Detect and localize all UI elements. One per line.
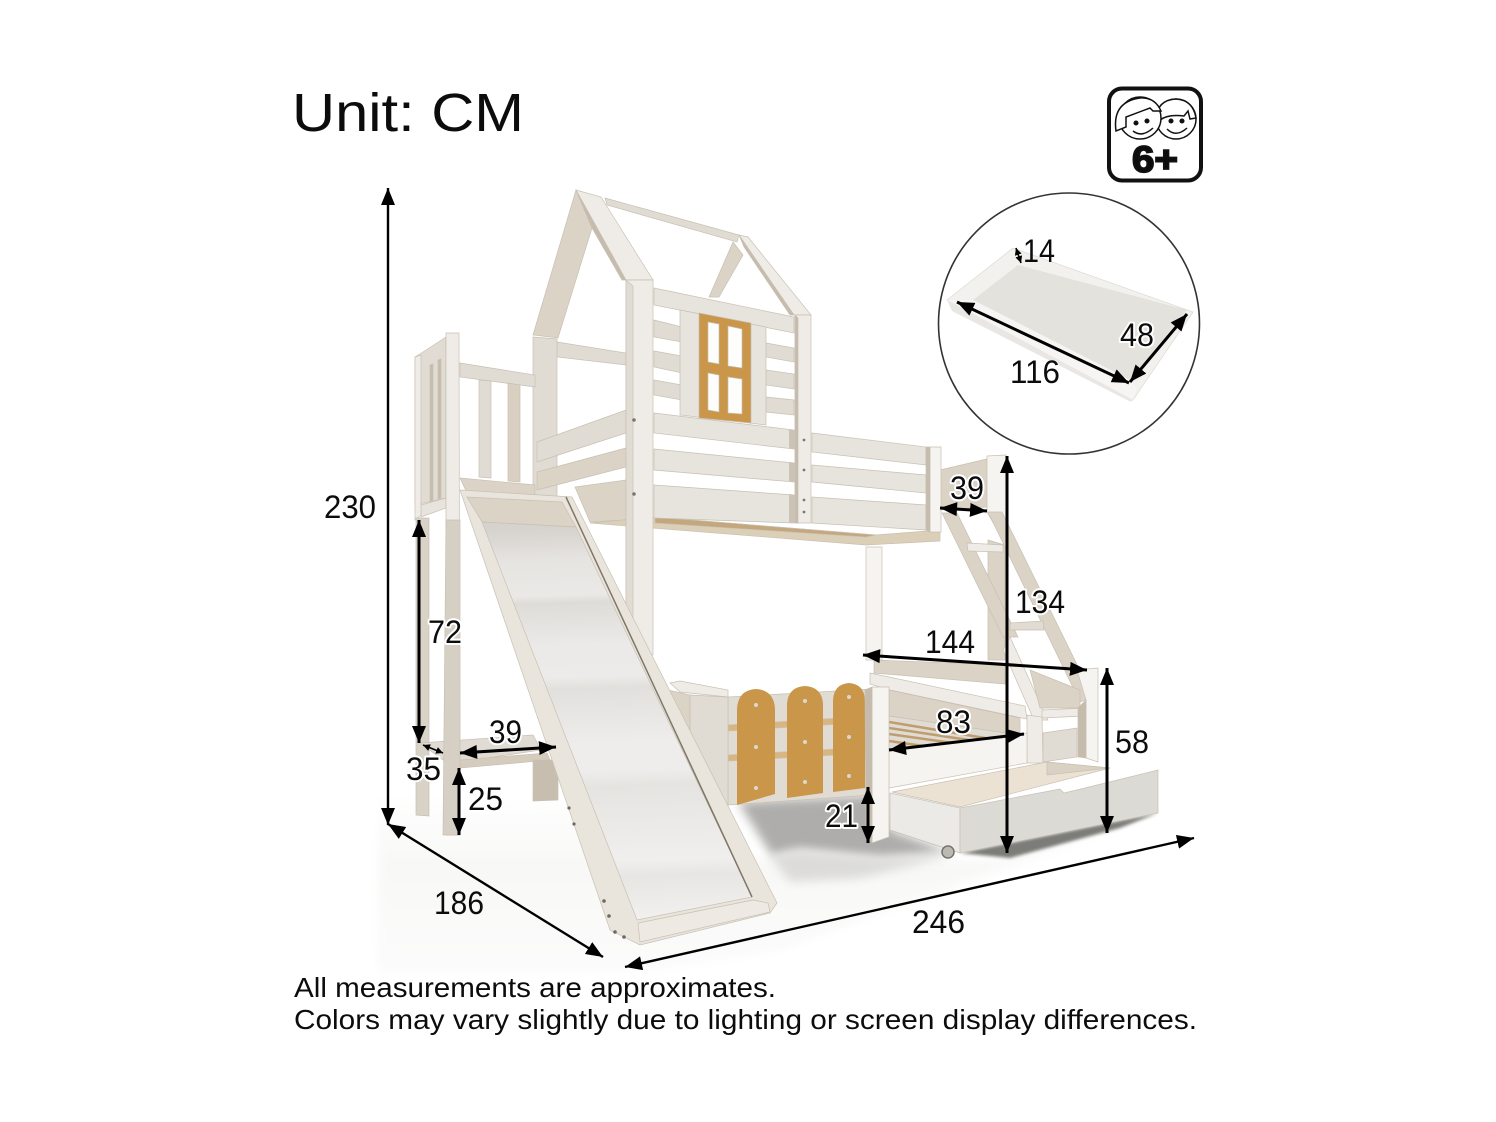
footnote [294,972,1197,1035]
lower bed front rail [889,733,1027,788]
left tower panel [415,337,446,520]
dimension arrows [388,188,1194,967]
label 246: 246 [912,904,965,940]
arrow: 134 [1006,456,1008,853]
label 48: 48 [1120,317,1154,353]
label 116: 116 [1010,354,1060,390]
title: Unit: CM [292,83,524,143]
arrow: 144 [863,655,1087,670]
house left gable [533,190,653,338]
house right gable [709,235,811,315]
label 25: 25 [468,781,503,817]
rear cross beam [557,342,626,365]
slide right rail line [566,497,752,897]
tower rear leg [416,518,429,816]
label lower 39: 39 [489,714,522,750]
badge text 6+: 6+ [1132,139,1178,180]
lower bed back post [866,547,882,660]
arrow: upper 39 [940,508,987,511]
right guard post [926,447,941,532]
slide frame [460,490,777,945]
ladder [940,455,1093,720]
right guard rails [812,433,926,530]
arrow: 35 [423,745,443,753]
upper bed slat base [590,517,940,545]
arrow: 14 [1016,248,1021,263]
label upper 39: 39 [950,470,984,506]
house ridge beam [605,198,739,242]
rear left post [533,337,557,500]
house front top beam [654,288,794,333]
lower bed slats [889,722,985,747]
slide top board [467,497,576,527]
window wall slats [654,320,794,415]
lower bed fence back panel [728,689,872,805]
label 144: 144 [925,624,975,660]
arrow: 58 [1106,668,1108,833]
left guard rails [537,410,626,522]
label 134: 134 [1015,584,1065,620]
bunk bed [415,190,1158,945]
label 186: 186 [434,885,484,921]
drawer wheel [942,846,954,858]
label 58: 58 [1115,724,1149,760]
arrow: length 246 [625,838,1194,967]
badge frame [1109,88,1201,180]
arrow: 25 [458,768,460,835]
tray [947,248,1193,402]
arrow: 116 [957,302,1129,383]
window panel [680,310,766,425]
step platform [420,735,558,801]
wooden fence pickets [737,683,865,805]
arrow: 72 [418,520,420,743]
slide bolts [567,806,626,939]
left tower balcony rail [460,363,535,497]
label 230: 230 [324,489,376,525]
arrow: lower 39 [460,747,556,753]
inset circle [938,193,1200,454]
footnote line 2: Colors may vary slightly due to lighting or screen display differences. [294,1004,1197,1035]
arrow: 83 [889,734,1024,750]
front guard rails [654,413,794,523]
age badge [1109,88,1201,180]
front house post [626,280,653,655]
slide bottom bar [638,900,770,942]
arrow: height 230 [387,188,389,825]
right house post [795,315,811,523]
label 83: 83 [936,704,971,740]
lower bed end panel [1027,668,1098,763]
arrow: depth 186 [388,824,603,957]
label 72: 72 [428,614,462,650]
lower bed head rails [870,660,1027,750]
tower front leg [443,333,460,835]
lower bed left post [668,681,728,810]
arrow: 21 [866,787,870,843]
slide surface [482,522,752,920]
floor shadow [378,790,1158,972]
label 14: 14 [1023,233,1055,269]
icon: two children faces [1116,97,1196,139]
lower bed right post [865,687,889,843]
arrow: 48 [1130,314,1187,382]
footnote line 1: All measurements are approximates. [294,972,776,1003]
wooden window [699,313,751,423]
dimension labels [324,470,1149,940]
inset: trundle tray [938,193,1200,454]
drawer [890,762,1158,858]
label 21: 21 [825,798,858,834]
slide [460,490,777,945]
label 35: 35 [406,751,441,787]
rail end shading [789,429,795,523]
